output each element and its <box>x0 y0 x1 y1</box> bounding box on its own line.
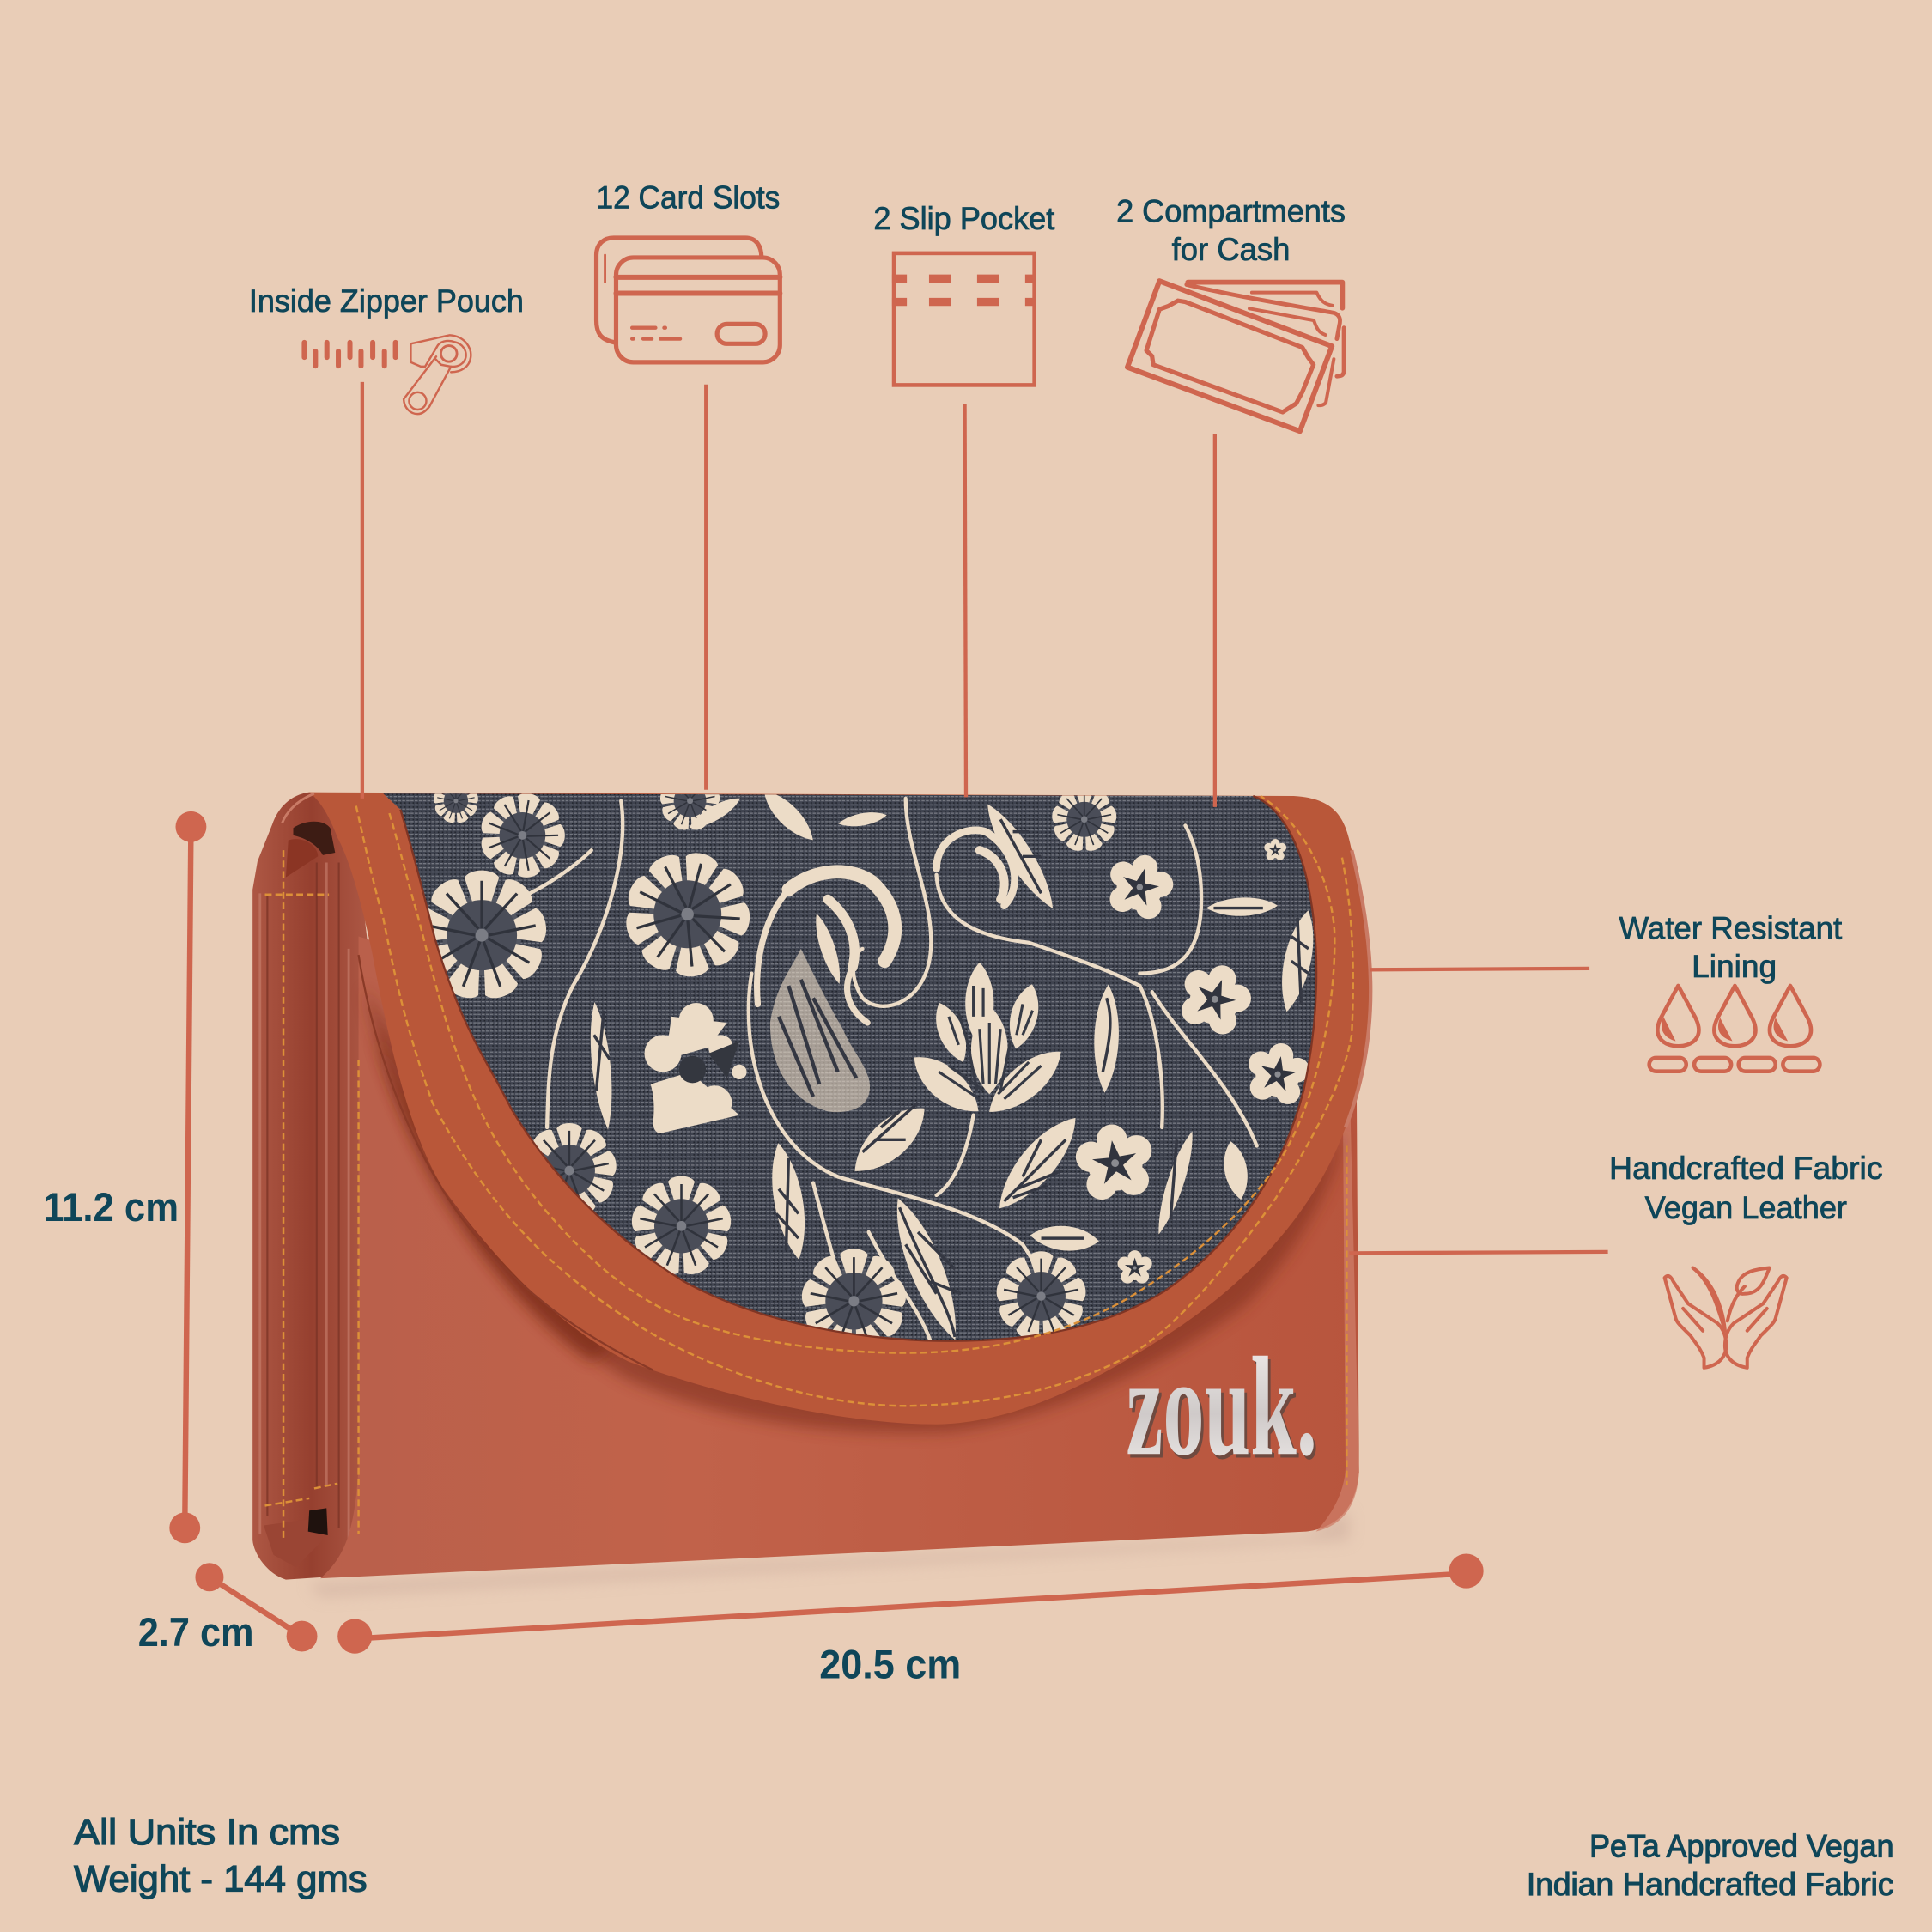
note: vegan and handcrafted <box>1527 1827 1894 1902</box>
label: card slots: 12 Card Slots <box>597 179 780 216</box>
wallet photo <box>252 771 1370 1597</box>
flower: upper <box>626 853 750 977</box>
flap leather border <box>309 793 1370 1425</box>
flower: top small <box>481 793 565 878</box>
wallet back and left gusset <box>252 793 369 1580</box>
leaf veins <box>594 819 1309 1337</box>
note: units and weight: All Units In cms <box>74 1812 340 1853</box>
dimension: height <box>43 811 206 1543</box>
right gusset edge highlight <box>1346 850 1370 1127</box>
fabric edge shade <box>400 796 1316 1341</box>
note: units and weight: Weight - 144 gms <box>74 1859 368 1900</box>
right edge stitching <box>1316 1115 1359 1532</box>
note: vegan and handcrafted: Indian Handcrafted Fabric <box>1527 1866 1894 1902</box>
callout: handcrafted fabric vegan leather <box>1349 1150 1883 1368</box>
label: handcrafted fabric: Handcrafted Fabric <box>1609 1150 1883 1186</box>
icon: zipper <box>304 335 471 414</box>
leader line <box>361 382 363 799</box>
label: compartments line 1: 2 Compartments <box>1116 192 1346 228</box>
bottom pocket opening <box>264 1518 323 1567</box>
flap outer welt <box>359 955 653 1370</box>
flower: blocky cream <box>644 1003 747 1133</box>
icon: hands and plant <box>1665 1268 1787 1368</box>
note: units and weight <box>74 1812 368 1900</box>
floral print <box>415 771 1321 1355</box>
dimension: width <box>337 1553 1484 1687</box>
fabric panel <box>383 793 1316 1341</box>
label: vegan leather: Vegan Leather <box>1645 1189 1847 1225</box>
leader line <box>705 385 708 790</box>
icon: pocket <box>892 253 1036 385</box>
depth value: 2.7 cm <box>138 1610 254 1656</box>
stems <box>530 799 1257 1340</box>
lotus flower <box>914 962 1061 1112</box>
top pocket opening <box>294 822 335 855</box>
inner pocket <box>286 839 318 878</box>
label: water resistant: Water Resistant <box>1619 909 1843 945</box>
callout: water resistant lining <box>1370 909 1843 1072</box>
callout: slip pocket <box>873 200 1055 797</box>
wallet ground shadow <box>308 1510 1349 1597</box>
paisley scrolls <box>770 949 870 1112</box>
label: lining: Lining <box>1692 948 1777 984</box>
leader line <box>1213 434 1216 807</box>
callout: inside zipper pouch <box>249 283 524 799</box>
icon: cash notes <box>1127 281 1344 431</box>
flap outer stitching <box>356 805 1353 1406</box>
icon: water drops <box>1649 986 1820 1072</box>
panel left stitching <box>358 1060 360 1534</box>
icon: cards <box>597 238 780 362</box>
callout: card slots <box>597 179 780 790</box>
zouk metal logo: zouk. <box>1127 1327 1317 1485</box>
label: compartments line 2: for Cash <box>1172 231 1290 267</box>
leaves <box>1206 897 1278 916</box>
leader line <box>1349 1252 1608 1253</box>
wallet front panel <box>320 937 1359 1578</box>
height value: 11.2 cm <box>43 1185 179 1230</box>
shadow under flap <box>365 986 1346 1432</box>
gusset folds <box>267 862 339 1528</box>
callout: compartments for cash <box>1116 192 1346 807</box>
cream flowers <box>1109 855 1173 919</box>
leader line <box>965 404 966 797</box>
dimension: depth <box>138 1563 317 1656</box>
flower: large left <box>428 871 546 998</box>
label: inside zipper pouch: Inside Zipper Pouch <box>249 283 524 319</box>
flap stitching <box>389 796 1334 1353</box>
note: vegan and handcrafted: PeTa Approved Vegan <box>1589 1827 1894 1863</box>
width value: 20.5 cm <box>819 1642 961 1687</box>
zouk metal logo: zouk. <box>1128 1332 1320 1489</box>
label: slip pocket: 2 Slip Pocket <box>873 200 1055 236</box>
zouk metal logo <box>1127 1327 1320 1489</box>
